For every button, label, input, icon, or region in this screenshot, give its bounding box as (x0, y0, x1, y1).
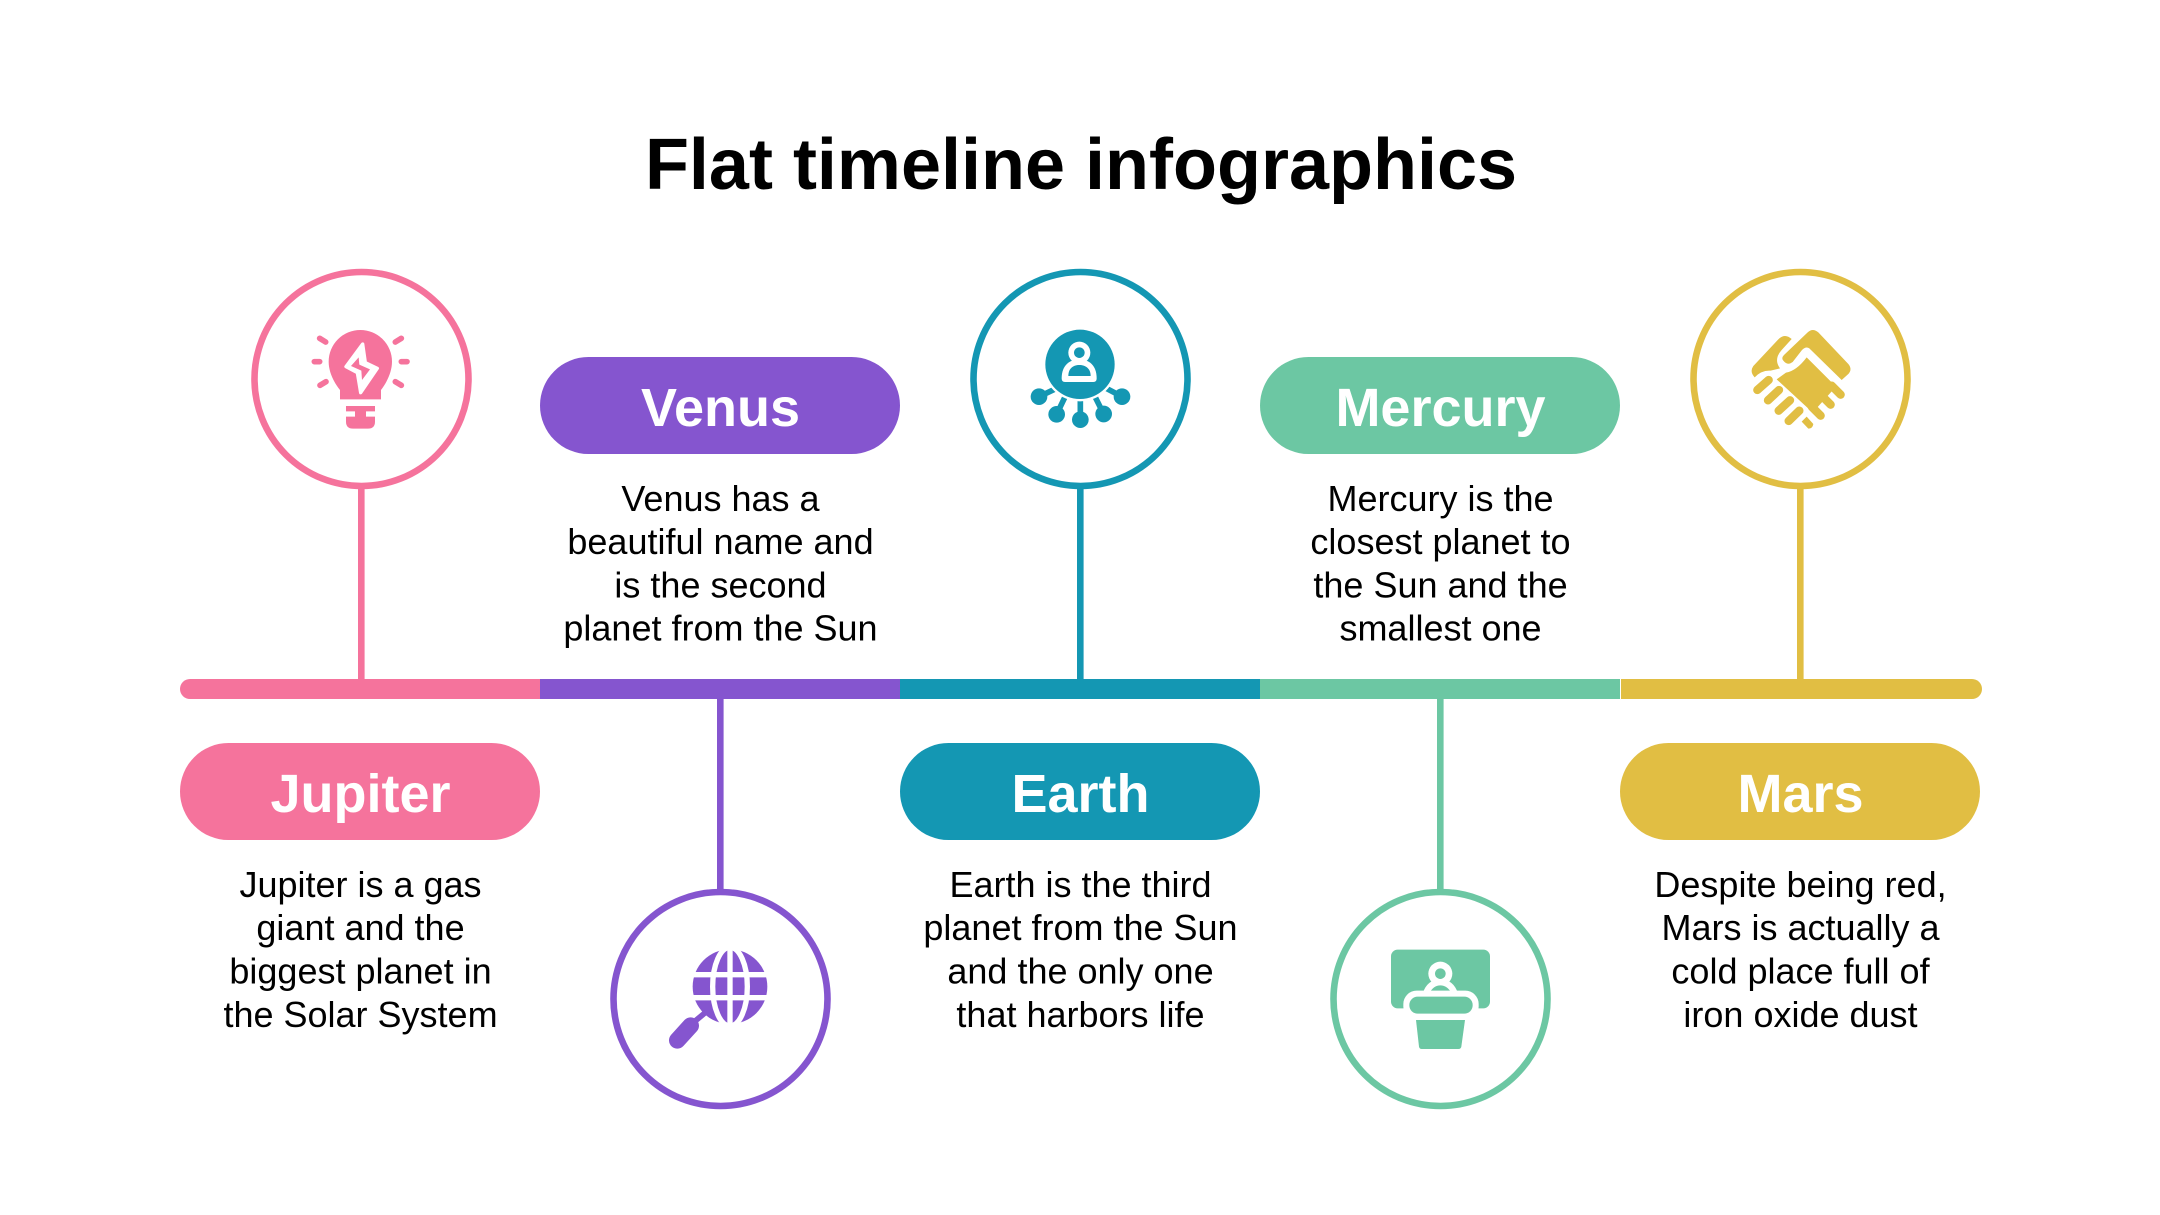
label pill: Mercury (1260, 357, 1620, 454)
description: Mercury: closest planet to (1310, 521, 1571, 562)
label: Mars: Mars (1737, 764, 1864, 824)
stem: Earth (1077, 486, 1084, 680)
description: Mars: Mars is actually a (1661, 907, 1941, 948)
timeline segment: Venus (540, 679, 900, 699)
icon: network user (1031, 327, 1130, 428)
title: Flat timeline infographics (645, 125, 1517, 205)
icon circle: Jupiter (254, 272, 468, 486)
label: Mercury: Mercury (1335, 378, 1546, 438)
label pill: Jupiter (180, 743, 540, 840)
timeline segment: Earth (900, 679, 1260, 699)
stem: Mercury (1437, 698, 1444, 892)
description: Jupiter: Jupiter is a gas (239, 864, 482, 905)
description: Venus: planet from the Sun (563, 608, 878, 648)
description: Earth: Earth is the third (949, 864, 1212, 905)
label: Venus: Venus (641, 378, 800, 438)
icon: handshake (1752, 330, 1850, 429)
panel: Venus (540, 357, 900, 1106)
icon: globe search (677, 947, 770, 1040)
description: Jupiter: biggest planet in (229, 950, 492, 992)
label: Earth: Earth (1011, 764, 1150, 824)
icon: light bulb (314, 330, 407, 429)
description: Earth: that harbors life (956, 994, 1205, 1035)
description: Jupiter: the Solar System (223, 994, 498, 1035)
icon circle: Mars (1694, 272, 1908, 486)
icon circle: Earth (974, 272, 1188, 486)
description: Mars: iron oxide dust (1683, 994, 1918, 1035)
icon circle: Venus (614, 892, 828, 1106)
timeline segment: Jupiter (180, 679, 540, 699)
panel: Jupiter (180, 272, 540, 1035)
label pill: Earth (900, 743, 1260, 840)
icon circle: Mercury (1334, 892, 1548, 1106)
description: Mercury: Mercury is the (1327, 478, 1554, 519)
stem: Jupiter (358, 486, 365, 680)
label pill: Venus (540, 357, 900, 454)
stem: Venus (717, 698, 724, 892)
description: Venus: is the second (614, 564, 827, 606)
description: Earth: and the only one (947, 950, 1214, 992)
icon: speaker at podium (1391, 950, 1490, 1049)
description: Mars: Despite being red, (1654, 864, 1947, 905)
description: Venus: beautiful name and (567, 521, 874, 562)
stem: Mars (1797, 486, 1804, 680)
description: Venus: Venus has a (621, 478, 821, 519)
timeline segment: Mercury (1260, 679, 1620, 699)
panel: Mercury (1260, 357, 1620, 1106)
description: Mercury: smallest one (1339, 608, 1542, 648)
timeline segment: Mars (1621, 679, 1982, 699)
description: Mars: cold place full of (1671, 950, 1931, 992)
panel: Mars (1620, 272, 1982, 1035)
label: Jupiter: Jupiter (270, 764, 451, 824)
label pill: Mars (1620, 743, 1980, 840)
panel: Earth (900, 272, 1260, 1035)
description: Earth: planet from the Sun (923, 907, 1238, 948)
description: Mercury: the Sun and the (1313, 564, 1568, 606)
description: Jupiter: giant and the (256, 907, 465, 948)
